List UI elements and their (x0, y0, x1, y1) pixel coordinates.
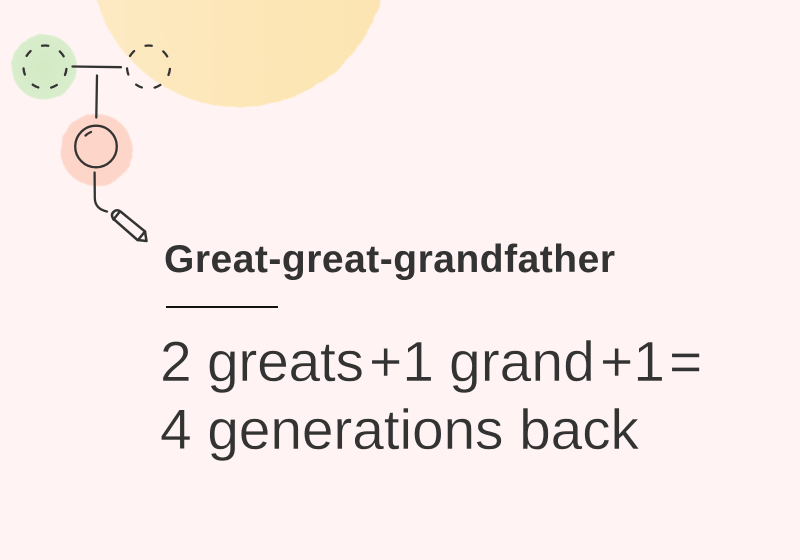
solid circle with highlight (75, 126, 117, 167)
line 1: grand (449, 330, 595, 394)
line 1: +1 (600, 330, 665, 394)
icon: pencil (112, 210, 146, 241)
line 1: = (669, 330, 702, 394)
body text (160, 330, 702, 462)
connector: curved line to pencil (95, 172, 107, 212)
line 2: 4 generations back (160, 398, 640, 462)
line 1: +1 (369, 330, 434, 394)
watercolor blob: green (12, 34, 76, 100)
heading: Great-great-grandfather (164, 238, 615, 281)
family tree diagram (21, 43, 173, 241)
watercolor blob: yellow (91, 0, 387, 107)
watercolor blob: red (60, 114, 132, 186)
dashed circle: right ancestor (124, 43, 173, 91)
dashed circle: green ancestor (21, 43, 69, 91)
divider line (166, 306, 278, 308)
connector: vertical (95, 76, 98, 118)
line 1: 2 greats (160, 330, 364, 394)
connector: horizontal (72, 65, 121, 68)
